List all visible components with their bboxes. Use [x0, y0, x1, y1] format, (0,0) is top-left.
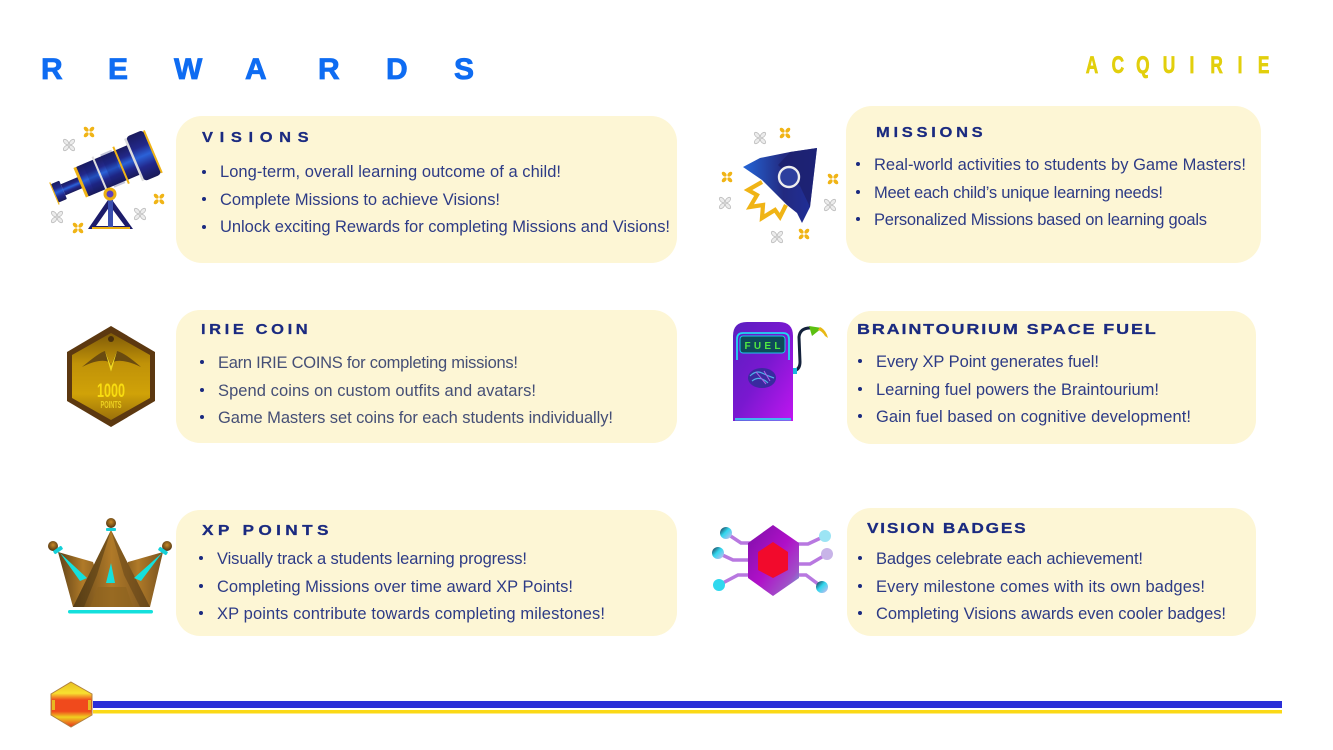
- heading: visions: VISIONS: [202, 130, 309, 146]
- bullet list: missions: Meet each child’s unique learning needs!: [874, 184, 1163, 202]
- heading: xp points: XP POINTS: [202, 522, 329, 539]
- brand name: ACQUIRIE: [1086, 52, 1269, 79]
- bullet list: visions: Long-term, overall learning outcome of a child!: [220, 163, 561, 181]
- bullet list: visions: Complete Missions to achieve Visions!: [220, 191, 500, 209]
- bullet list: xp points: XP points contribute towards completing milestones!: [217, 605, 605, 623]
- heading: missions: MISSIONS: [876, 125, 983, 141]
- bullet list: missions: [856, 156, 1246, 229]
- bullet list: vision badges: Badges celebrate each achievement!: [876, 550, 1143, 568]
- bullet list: braintourium space fuel: Learning fuel powers the Braintourium!: [876, 381, 1159, 399]
- bullet list: irie coin: Earn IRIE COINS for completing missions!: [218, 354, 518, 372]
- bullet list: missions: Real-world activities to students by Game Masters!: [874, 156, 1246, 174]
- bullet list: irie coin: Spend coins on custom outfits and avatars!: [218, 382, 536, 400]
- icon: fuel pump: FUEL: [744, 341, 780, 352]
- bullet list: missions: Personalized Missions based on learning goals: [874, 211, 1207, 229]
- icon: vision badge: [712, 525, 833, 596]
- panel: xp points: [176, 510, 677, 636]
- panel: visions: [176, 116, 677, 263]
- icon: irie coin: POINTS: [100, 400, 122, 411]
- panel: braintourium space fuel: [847, 311, 1256, 444]
- footer bars: [93, 701, 1282, 714]
- bullet list: vision badges: Completing Visions awards even cooler badges!: [876, 605, 1226, 623]
- bullet list: xp points: Visually track a students learning progress!: [217, 550, 527, 568]
- title: REWARDS: [41, 53, 474, 86]
- icon: irie coin: 1000: [97, 381, 125, 402]
- footer logo: [51, 682, 92, 727]
- bullet list: visions: Unlock exciting Rewards for completing Missions and Visions!: [220, 218, 670, 236]
- bullet list: braintourium space fuel: [858, 353, 1191, 426]
- icon: crown: [48, 518, 172, 614]
- heading: vision badges: VISION BADGES: [867, 520, 1026, 537]
- bullet list: xp points: [199, 550, 605, 623]
- bullet list: irie coin: Game Masters set coins for each students individually!: [218, 409, 613, 427]
- bullet list: vision badges: [858, 550, 1226, 623]
- panel: missions: [846, 106, 1261, 263]
- bullet list: vision badges: Every milestone comes with its own badges!: [876, 578, 1205, 596]
- icon: rocket: [718, 127, 839, 244]
- panel: irie coin: [176, 310, 677, 443]
- icon: irie coin: [67, 326, 155, 427]
- heading: irie coin: IRIE COIN: [201, 322, 308, 338]
- bullet list: braintourium space fuel: Gain fuel based on cognitive development!: [876, 408, 1191, 426]
- bullet list: braintourium space fuel: Every XP Point generates fuel!: [876, 353, 1099, 371]
- bullet list: xp points: Completing Missions over time award XP Points!: [217, 578, 573, 596]
- icon: fuel pump: [733, 322, 828, 421]
- bullet list: irie coin: [200, 354, 613, 427]
- bullet list: visions: [202, 163, 670, 236]
- panel: vision badges: [847, 508, 1256, 636]
- icon: telescope: [45, 126, 165, 234]
- heading: braintourium space fuel: BRAINTOURIUM SPACE FUEL: [857, 320, 1156, 338]
